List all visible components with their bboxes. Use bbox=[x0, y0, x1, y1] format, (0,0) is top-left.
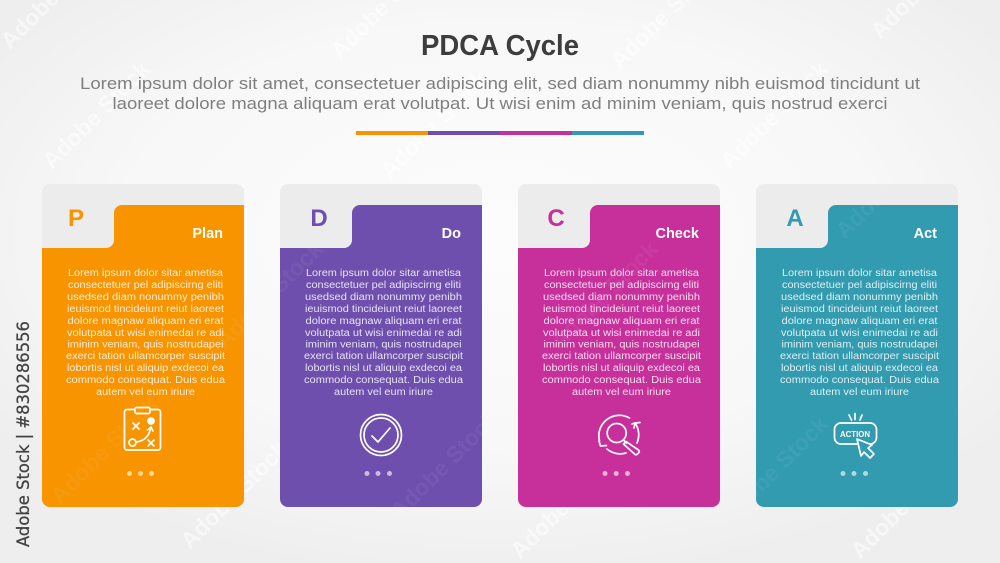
tab background: check bbox=[518, 184, 720, 507]
body text: act: commodo consequat. Duis edua bbox=[780, 375, 939, 386]
heading: Do: Do bbox=[442, 226, 461, 242]
background watermarks: Adobe Stock bbox=[375, 66, 493, 184]
panel: act bbox=[756, 184, 958, 507]
letter: C: C bbox=[547, 205, 565, 232]
body text: check: dolore magnaw aliquam eri erat bbox=[544, 316, 700, 327]
body text: check: lobortis nisl ut aliquip exdecoi ea bbox=[543, 363, 700, 374]
subtitle: Lorem ipsum dolor sit amet, consectetuer adipiscing elit, sed diam nonummy nibh euismod tincidunt ut bbox=[80, 74, 920, 93]
body text: do: consectetuer pel adipiscirng eliti bbox=[306, 280, 461, 291]
body text: do: iminim veniam, quis nostrudapei bbox=[306, 340, 462, 350]
icon: action button with cursor: ACTION bbox=[840, 430, 870, 439]
tab background: do bbox=[280, 184, 482, 507]
body text: plan: iminim veniam, quis nostrudapei bbox=[68, 340, 224, 350]
body text: check: autem vel eum iriure bbox=[572, 387, 671, 398]
body text: check: consectetuer pel adipiscirng eliti bbox=[544, 280, 699, 291]
body text: check: volutpata ut wisi enimedai re adi bbox=[543, 328, 700, 339]
body text: act: autem vel eum iriure bbox=[810, 387, 909, 398]
body text: plan: lobortis nisl ut aliquip exdecoi ea bbox=[67, 363, 224, 374]
body text: plan bbox=[66, 268, 225, 398]
body text: act: ieuismod tincideiunt reiut laoreet bbox=[781, 304, 938, 315]
card watermarks: Adobe Stock bbox=[830, 126, 948, 244]
subtitle bbox=[80, 74, 920, 113]
background watermarks: Adobe Stock bbox=[505, 446, 623, 563]
card body: check bbox=[518, 205, 720, 507]
panel: do bbox=[280, 184, 482, 507]
icon: tactics clipboard bbox=[124, 408, 160, 450]
body text: check: iminim veniam, quis nostrudapei bbox=[544, 340, 700, 350]
panel: plan bbox=[42, 184, 244, 507]
colour divider bbox=[356, 131, 644, 135]
card body: act bbox=[756, 205, 958, 507]
background watermarks: Adobe Stock bbox=[845, 446, 963, 563]
heading: Check: Check bbox=[655, 226, 700, 242]
body text: do: autem vel eum iriure bbox=[334, 387, 433, 398]
card body: do bbox=[280, 205, 482, 507]
body text: plan: dolore magnaw aliquam eri erat bbox=[68, 316, 224, 327]
body text: plan: commodo consequat. Duis edua bbox=[66, 375, 225, 386]
title: PDCA Cycle bbox=[421, 30, 579, 62]
body text: do: volutpata ut wisi enimedai re adi bbox=[305, 328, 462, 339]
body text: act: usedsed diam nonummy penibh bbox=[781, 292, 938, 303]
pagination dots: do bbox=[364, 471, 392, 476]
pagination dots: act bbox=[840, 471, 868, 476]
background watermarks: Adobe Stock bbox=[175, 436, 293, 554]
tab background: plan bbox=[42, 184, 244, 507]
card body: plan bbox=[42, 205, 244, 507]
body text: act: volutpata ut wisi enimedai re adi bbox=[781, 328, 938, 339]
card watermarks: Adobe Stock bbox=[715, 411, 833, 529]
body text: check bbox=[542, 268, 701, 398]
body text: plan: exerci tation ullamcorper suscipit bbox=[66, 351, 225, 362]
subtitle: laoreet dolore magna aliquam erat volutpat. Ut wisi enim ad minim veniam, quis nostrud exerci bbox=[112, 94, 888, 113]
icon: magnifier with cycle arrows bbox=[599, 415, 640, 455]
body text: do bbox=[304, 268, 463, 398]
icon: check badge bbox=[360, 414, 402, 456]
body text: act bbox=[780, 268, 939, 398]
body text: plan: usedsed diam nonummy penibh bbox=[67, 292, 224, 303]
card watermarks: Adobe Stock bbox=[45, 391, 163, 509]
body text: do: exerci tation ullamcorper suscipit bbox=[304, 351, 463, 362]
tab background: act bbox=[756, 184, 958, 507]
body text: act: dolore magnaw aliquam eri erat bbox=[782, 316, 938, 327]
body text: do: dolore magnaw aliquam eri erat bbox=[306, 316, 462, 327]
card watermarks: Adobe Stock bbox=[210, 236, 328, 354]
body text: check: ieuismod tincideiunt reiut laoreet bbox=[543, 304, 700, 315]
adobe stock side label: Adobe Stock | #830286556 bbox=[14, 321, 34, 547]
card watermarks: Adobe Stock bbox=[545, 236, 663, 354]
body text: act: iminim veniam, quis nostrudapei bbox=[782, 340, 938, 350]
body text: check: exerci tation ullamcorper suscipit bbox=[542, 351, 701, 362]
body text: do: usedsed diam nonummy penibh bbox=[305, 292, 462, 303]
body text: act: Lorem ipsum dolor sitar ametisa bbox=[782, 268, 937, 279]
body text: plan: autem vel eum iriure bbox=[96, 387, 195, 398]
background watermarks: Adobe Stock bbox=[715, 56, 833, 174]
letter: D: D bbox=[310, 205, 328, 232]
body text: plan: consectetuer pel adipiscirng eliti bbox=[68, 280, 223, 291]
body text: act: lobortis nisl ut aliquip exdecoi ea bbox=[781, 363, 938, 374]
card watermarks: Adobe Stock bbox=[385, 406, 503, 524]
body text: do: commodo consequat. Duis edua bbox=[304, 375, 463, 386]
background watermarks: Adobe Stock bbox=[37, 56, 155, 174]
body text: do: Lorem ipsum dolor sitar ametisa bbox=[306, 268, 461, 279]
body text: check: usedsed diam nonummy penibh bbox=[543, 292, 700, 303]
panel: check bbox=[518, 184, 720, 507]
body text: act: exerci tation ullamcorper suscipit bbox=[780, 351, 939, 362]
letter: P: P bbox=[68, 205, 84, 232]
body text: plan: ieuismod tincideiunt reiut laoreet bbox=[67, 304, 224, 315]
pagination dots: plan bbox=[127, 471, 154, 476]
body text: check: Lorem ipsum dolor sitar ametisa bbox=[544, 268, 699, 279]
heading: Plan: Plan bbox=[192, 226, 223, 242]
body text: check: commodo consequat. Duis edua bbox=[542, 375, 701, 386]
body text: plan: Lorem ipsum dolor sitar ametisa bbox=[68, 268, 223, 279]
body text: plan: volutpata ut wisi enimedai re adi bbox=[67, 328, 224, 339]
pagination dots: check bbox=[602, 471, 630, 476]
letter: A: A bbox=[786, 205, 804, 232]
body text: do: ieuismod tincideiunt reiut laoreet bbox=[305, 304, 462, 315]
body text: act: consectetuer pel adipiscirng eliti bbox=[782, 280, 937, 291]
body text: do: lobortis nisl ut aliquip exdecoi ea bbox=[305, 363, 462, 374]
heading: Act: Act bbox=[914, 226, 937, 242]
card watermarks bbox=[45, 126, 948, 529]
icon: action button with cursor bbox=[834, 414, 876, 458]
